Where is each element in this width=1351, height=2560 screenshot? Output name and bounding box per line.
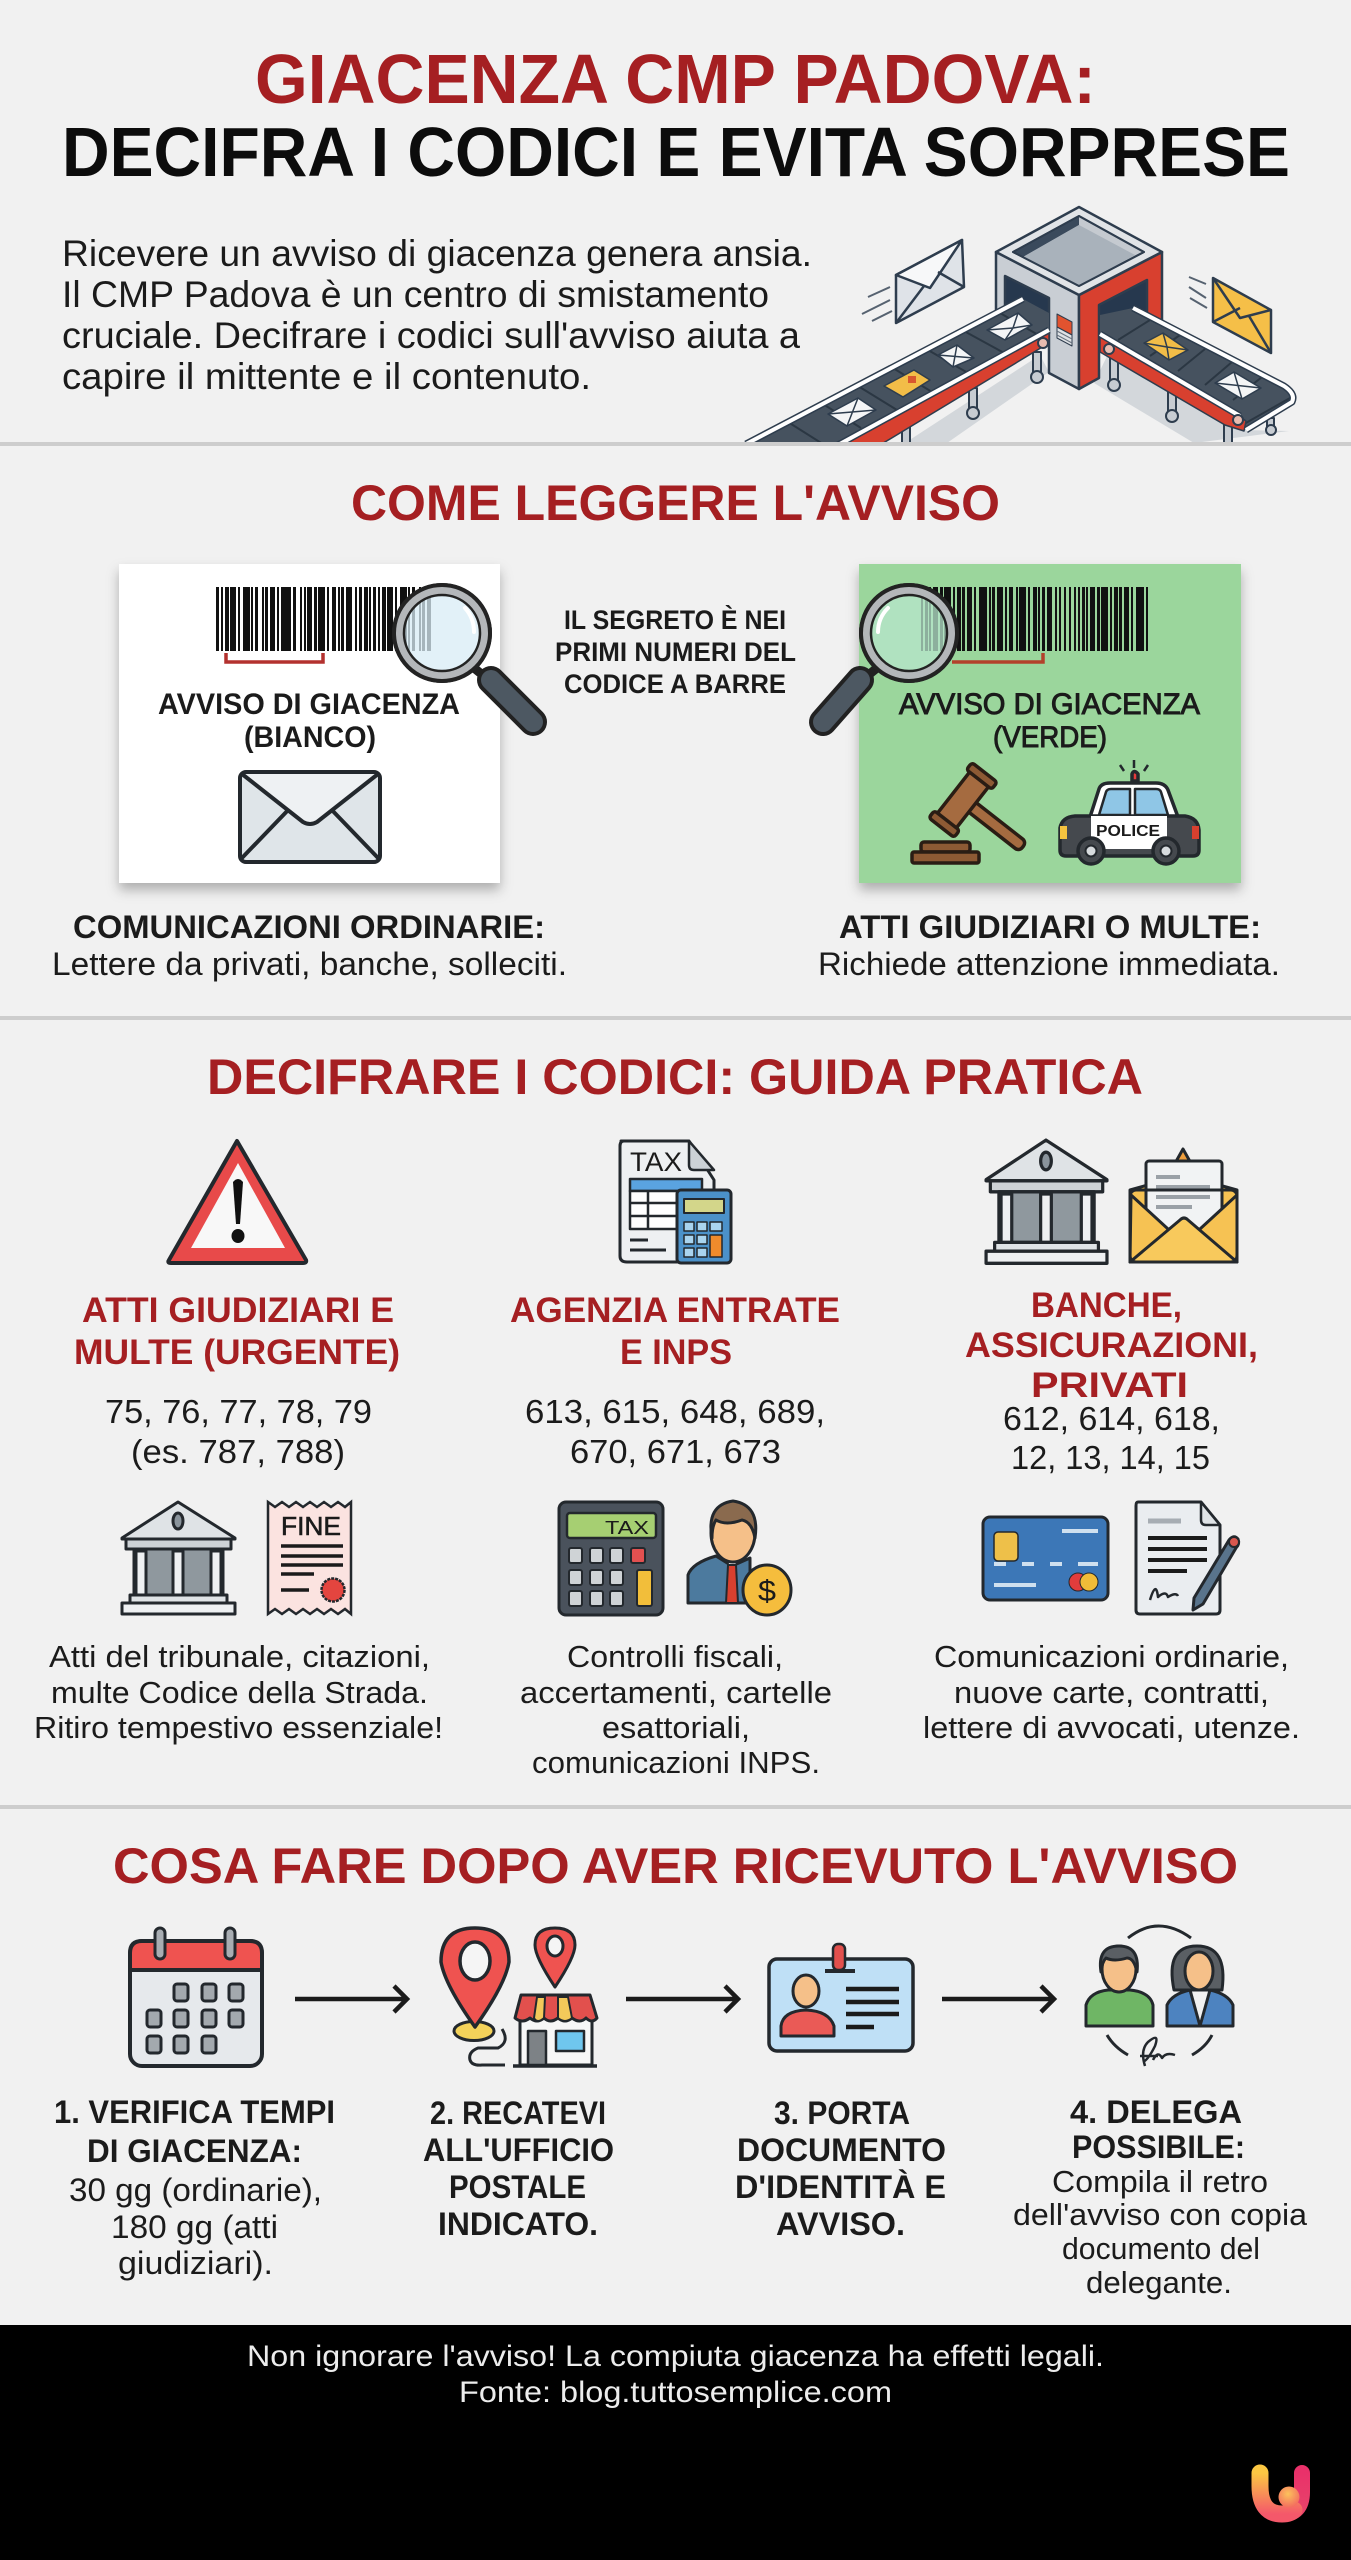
icon: police car: [1060, 760, 1199, 864]
arrow: [626, 1986, 738, 2012]
heading: [510, 1291, 840, 1372]
barcode: [216, 587, 431, 651]
heading: [74, 1291, 400, 1372]
codes: 612, 614, 618,: [1003, 1400, 1220, 1437]
icon: gavel: [912, 763, 1044, 874]
caption: ordinary communications: Lettere da privati, banche, solleciti.: [52, 946, 567, 982]
divider: [0, 1016, 1351, 1020]
description: [34, 1639, 443, 1745]
heading: COSA FARE DOPO AVER RICEVUTO L'AVVISO: [113, 1838, 1238, 1894]
icon: bank: [986, 1140, 1107, 1263]
step 1: [54, 2094, 335, 2281]
icon: accountant with dollar coin: [688, 1501, 791, 1615]
caption: judicial acts or fines: ATTI GIUDIZIARI O MULTE:: [839, 909, 1261, 945]
icon: warning triangle: [168, 1141, 306, 1263]
column: atti giudiziari: [34, 1141, 443, 1745]
title: DECIFRA I CODICI E EVITA SORPRESE: [62, 113, 1290, 191]
box body: [1006, 278, 1048, 312]
description: Ritiro tempestivo essenziale!: [34, 1710, 443, 1745]
heading: AGENZIA ENTRATE: [510, 1291, 840, 1330]
icon: courthouse: [122, 1502, 235, 1614]
icon: magnifier left: [394, 585, 533, 722]
heading: E INPS: [620, 1333, 732, 1372]
caption: ordinary communications: COMUNICAZIONI ORDINARIE:: [73, 909, 545, 945]
description: lettere di avvocati, utenze.: [923, 1710, 1300, 1745]
white notice card: [119, 564, 500, 883]
panel: come leggere l'avviso: [52, 475, 1280, 982]
step 3: AVVISO.: [776, 2206, 905, 2242]
step 2: 2. RECATEVI: [430, 2095, 606, 2131]
flying envelopes: [896, 240, 1271, 353]
icon: tax form and calculator: TAX: [630, 1147, 682, 1177]
step 3: 3. PORTA: [774, 2095, 910, 2131]
step 2: [423, 2095, 614, 2242]
heading: ATTI GIUDIZIARI E: [82, 1291, 394, 1330]
icon: signed contract: [1136, 1502, 1239, 1614]
intro text block: Il CMP Padova è un centro di smistamento: [62, 274, 769, 315]
description: accertamenti, cartelle: [520, 1675, 832, 1710]
heading: DECIFRARE I CODICI: GUIDA PRATICA: [207, 1049, 1143, 1105]
codes: 670, 671, 673: [570, 1433, 781, 1470]
caption: ordinary communications: [52, 909, 567, 982]
divider: [0, 442, 1351, 446]
intro text block: Ricevere un avviso di giacenza genera ansia.: [62, 233, 812, 274]
icon: identity card: [769, 1944, 913, 2051]
arrow: [942, 1986, 1054, 2012]
icon: delegate and signature: [1086, 1926, 1233, 2066]
step 1: giudiziari).: [118, 2245, 273, 2281]
step 3: DOCUMENTO: [737, 2132, 946, 2168]
icon: open envelope with letter: [1130, 1149, 1237, 1262]
description: esattoriali,: [602, 1710, 750, 1745]
step 3: [735, 2095, 946, 2242]
intro text block: cruciale. Decifrare i codici sull'avviso aiuta a: [62, 315, 800, 356]
codes: 12, 13, 14, 15: [1011, 1439, 1210, 1476]
icon: calculator: [559, 1502, 663, 1615]
step 3: D'IDENTITÀ E: [735, 2169, 946, 2205]
step 4: POSSIBILE:: [1072, 2129, 1245, 2165]
icon: tax form and calculator: [620, 1141, 731, 1263]
intro text block: capire il mittente e il contenuto.: [62, 356, 591, 397]
barcode: [921, 587, 1149, 651]
step 1: 180 gg (atti: [111, 2209, 278, 2245]
icon: fine receipt: FINE: [281, 1511, 341, 1541]
green notice card: [859, 564, 1241, 883]
callout: barcode secret: [555, 604, 796, 699]
panel: decifrare i codici: [34, 1049, 1300, 1780]
step 2: INDICATO.: [438, 2206, 598, 2242]
step 2: ALL'UFFICIO: [423, 2132, 614, 2168]
description: comunicazioni INPS.: [532, 1745, 820, 1780]
step 4: documento del: [1062, 2231, 1260, 2266]
footer note: [247, 2340, 1104, 2409]
description: Atti del tribunale, citazioni,: [49, 1639, 430, 1674]
heading: COME LEGGERE L'AVVISO: [351, 475, 1000, 531]
title: GIACENZA CMP PADOVA:: [255, 40, 1096, 118]
step 1: 30 gg (ordinarie),: [69, 2172, 322, 2208]
step 4: Compila il retro: [1052, 2164, 1268, 2199]
green notice card: (VERDE): [993, 721, 1107, 754]
icon: envelope: [240, 772, 380, 862]
footer note: Non ignorare l'avviso! La compiuta giacenza ha effetti legali.: [247, 2340, 1104, 2373]
right conveyor: [1100, 308, 1292, 430]
description: Comunicazioni ordinarie,: [934, 1639, 1289, 1674]
arrow: [295, 1986, 407, 2012]
white notice card: (BIANCO): [244, 721, 376, 754]
footer note: Fonte: blog.tuttosemplice.com: [459, 2376, 892, 2409]
green notice card: AVVISO DI GIACENZA: [899, 688, 1200, 721]
callout: barcode secret: IL SEGRETO È NEI: [564, 604, 786, 635]
description: [923, 1639, 1300, 1745]
callout: barcode secret: CODICE A BARRE: [564, 669, 786, 699]
icon: police car: POLICE: [1096, 823, 1160, 840]
codes: 75, 76, 77, 78, 79: [105, 1393, 372, 1430]
column: banche e assicurazioni: [923, 1140, 1300, 1745]
description: multe Codice della Strada.: [51, 1675, 428, 1710]
footer band: [0, 2325, 1351, 2560]
belt envelopes: [828, 313, 1261, 426]
icon: calculator: TAX: [605, 1518, 649, 1538]
heading: MULTE (URGENTE): [74, 1333, 400, 1372]
left conveyor: [748, 299, 1049, 443]
logo: [1260, 2473, 1302, 2514]
codes: (es. 787, 788): [131, 1433, 345, 1470]
step 4: dell'avviso con copia: [1013, 2197, 1308, 2232]
codes: [105, 1393, 372, 1470]
description: Controlli fiscali,: [567, 1639, 783, 1674]
caption: judicial acts or fines: Richiede attenzione immediata.: [818, 946, 1280, 982]
column: agenzia entrate: [510, 1141, 840, 1780]
icon: calendar: [130, 1928, 262, 2066]
icon: credit card: [983, 1517, 1108, 1600]
step 4: [1013, 2094, 1308, 2300]
heading: [965, 1286, 1258, 1405]
intro text block: [62, 233, 812, 397]
divider: [0, 1805, 1351, 1809]
white notice card: AVVISO DI GIACENZA: [158, 688, 460, 721]
step 1: DI GIACENZA:: [87, 2133, 302, 2169]
illustration: sorting centre with conveyor belts: [746, 207, 1293, 446]
description: nuove carte, contratti,: [954, 1675, 1269, 1710]
heading: BANCHE,: [1031, 1286, 1182, 1325]
icon: fine receipt: [268, 1502, 351, 1614]
caption: judicial acts or fines: [818, 909, 1280, 982]
step 4: delegante.: [1086, 2265, 1232, 2300]
codes: [525, 1393, 825, 1470]
description: [520, 1639, 832, 1780]
icon: magnifier right: [823, 585, 957, 722]
pillar label: [1057, 314, 1072, 335]
panel: cosa fare dopo: [54, 1838, 1308, 2300]
title: [62, 40, 1290, 191]
icon: map pins and post office: [441, 1928, 597, 2066]
step 2: POSTALE: [449, 2169, 586, 2205]
icon: accountant with dollar coin: $: [758, 1575, 776, 1608]
codes: [1003, 1400, 1220, 1476]
heading: PRIVATI: [1031, 1366, 1188, 1405]
step 1: 1. VERIFICA TEMPI: [54, 2094, 335, 2130]
step 4: 4. DELEGA: [1070, 2094, 1242, 2130]
callout: barcode secret: PRIMI NUMERI DEL: [555, 637, 796, 667]
codes: 613, 615, 648, 689,: [525, 1393, 825, 1430]
heading: ASSICURAZIONI,: [965, 1326, 1258, 1365]
